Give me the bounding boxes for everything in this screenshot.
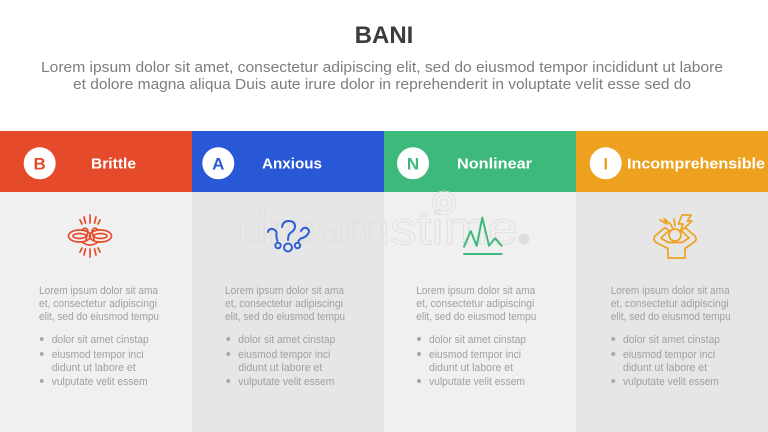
subtitle text	[41, 60, 723, 93]
body text: Brittle: et, consectetur adipiscingi	[39, 298, 157, 310]
body text: Anxious: didunt ut labore et	[238, 362, 322, 374]
header: Incomprehensible: Incomprehensible	[627, 156, 765, 172]
body text: Incomprehensible: vulputate velit essem	[623, 376, 719, 388]
header: Nonlinear: Nonlinear	[457, 156, 532, 172]
body text: Anxious	[225, 285, 345, 388]
body text: Incomprehensible: elit, sed do eiusmod tempu	[611, 311, 731, 323]
body text: Nonlinear: didunt ut labore et	[429, 362, 513, 374]
body text: Nonlinear: vulputate velit essem	[429, 376, 525, 388]
panel: Anxious	[192, 131, 384, 432]
body text: Incomprehensible	[611, 285, 731, 388]
body text: Anxious: eiusmod tempor inci	[238, 349, 330, 361]
icon: nonlinear line chart	[464, 218, 502, 254]
icon: broken chain	[68, 215, 112, 257]
title: BANI	[355, 22, 413, 49]
body text: Incomprehensible: eiusmod tempor inci	[623, 349, 715, 361]
header: Incomprehensible	[576, 131, 768, 192]
header: Brittle	[0, 131, 192, 192]
header: Nonlinear	[384, 131, 576, 192]
body text: Anxious: elit, sed do eiusmod tempu	[225, 311, 345, 323]
body text: Brittle	[39, 285, 159, 388]
body text: Incomprehensible: Lorem ipsum dolor sit ama	[611, 285, 731, 297]
body text: Brittle: didunt ut labore et	[52, 362, 136, 374]
body text: Brittle: eiusmod tempor inci	[52, 349, 144, 361]
icon: stressed person	[654, 215, 696, 258]
body text: Anxious: dolor sit amet cinstap	[238, 334, 335, 346]
watermark: dreamstime	[238, 202, 518, 254]
icon: question marks	[268, 221, 309, 252]
panel: Nonlinear	[384, 131, 576, 432]
header: Brittle: B	[34, 154, 46, 174]
body text: Nonlinear: eiusmod tempor inci	[429, 349, 521, 361]
watermark	[238, 191, 529, 254]
body text: Incomprehensible: didunt ut labore et	[623, 362, 707, 374]
body text: Brittle: dolor sit amet cinstap	[52, 334, 149, 346]
subtitle text: Lorem ipsum dolor sit amet, consectetur adipiscing elit, sed do eiusmod tempor incididunt ut labore	[41, 60, 723, 76]
body text: Brittle: elit, sed do eiusmod tempu	[39, 311, 159, 323]
header: Brittle: Brittle	[91, 156, 136, 172]
body text: Nonlinear: dolor sit amet cinstap	[429, 334, 526, 346]
panel: Incomprehensible	[576, 131, 768, 432]
panel: Brittle	[0, 131, 192, 432]
body text: Anxious: vulputate velit essem	[238, 376, 334, 388]
body text: Incomprehensible: dolor sit amet cinstap	[623, 334, 720, 346]
body text: Nonlinear: Lorem ipsum dolor sit ama	[416, 285, 536, 297]
header: Anxious: A	[212, 154, 224, 174]
body text: Brittle: vulputate velit essem	[52, 376, 148, 388]
header: Nonlinear: N	[407, 154, 419, 174]
body text: Nonlinear: elit, sed do eiusmod tempu	[416, 311, 536, 323]
header: Anxious	[192, 131, 384, 192]
body text: Nonlinear: et, consectetur adipiscingi	[416, 298, 534, 310]
subtitle text: et dolore magna aliqua Duis aute irure dolor in reprehenderit in voluptate velit esse sed do	[73, 77, 691, 93]
body text: Incomprehensible: et, consectetur adipiscingi	[611, 298, 729, 310]
body text: Anxious: Lorem ipsum dolor sit ama	[225, 285, 345, 297]
body text: Brittle: Lorem ipsum dolor sit ama	[39, 285, 159, 297]
body text: Anxious: et, consectetur adipiscingi	[225, 298, 343, 310]
header: Anxious: Anxious	[262, 156, 322, 172]
header: Incomprehensible: I	[603, 154, 608, 174]
body text: Nonlinear	[416, 285, 536, 388]
